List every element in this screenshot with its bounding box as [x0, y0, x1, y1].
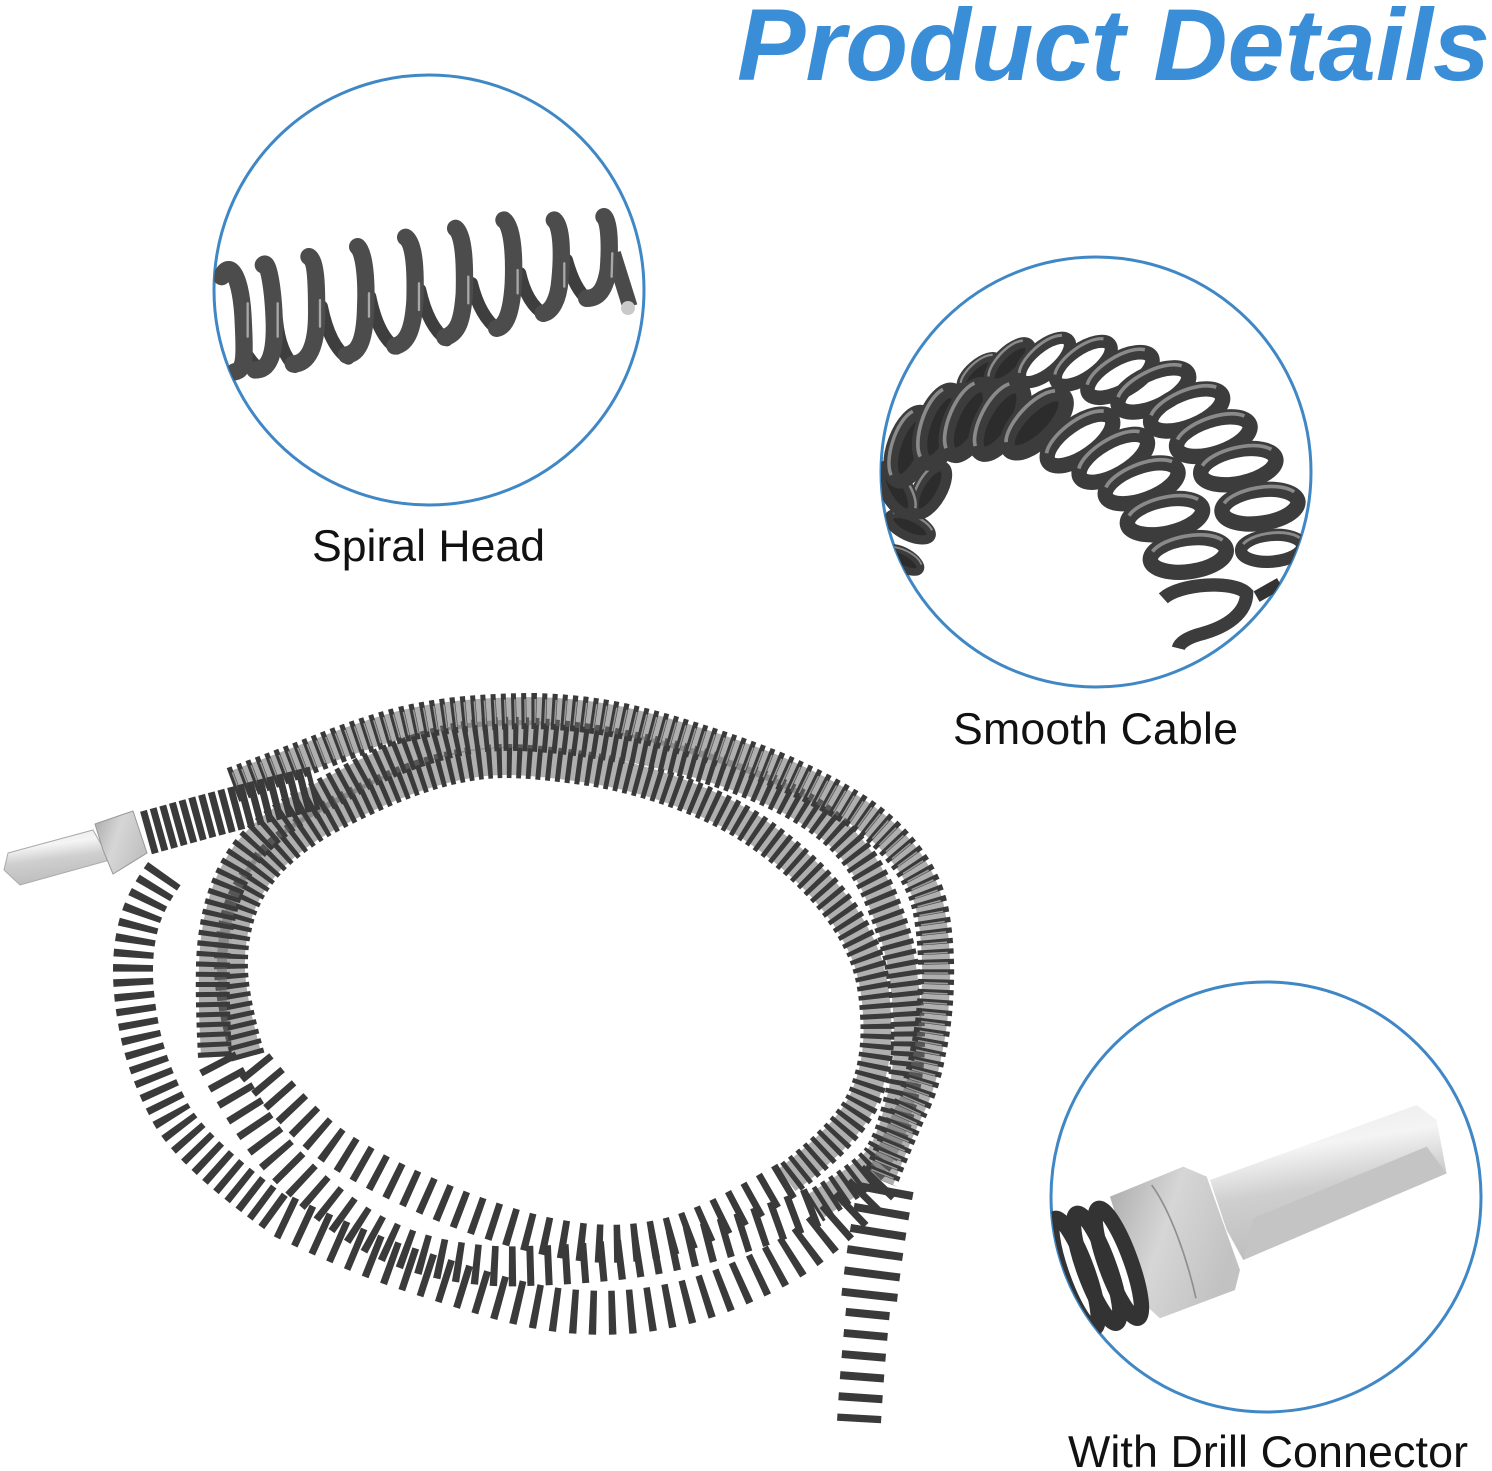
cable strand: middle loop — [213, 734, 908, 1266]
cable strand: outer loop — [133, 711, 936, 1313]
collar groove — [1152, 1185, 1196, 1298]
spiral coil — [222, 217, 635, 372]
panel: drill connector — [1043, 982, 1481, 1412]
wire tip — [621, 301, 635, 315]
connector close-up — [1043, 1105, 1447, 1332]
drill connector shank — [4, 830, 110, 885]
drill connector collar — [95, 811, 147, 874]
spring turns — [1043, 1204, 1150, 1332]
shank — [1210, 1105, 1447, 1260]
panel: spiral head — [214, 75, 644, 505]
tight spring by connector — [146, 788, 315, 833]
circle outline: drill connector — [1051, 982, 1481, 1412]
label: smooth cable: Smooth Cable — [953, 705, 1238, 754]
label: spiral head: Spiral Head — [312, 522, 545, 571]
cable strand: inner loop — [231, 761, 878, 1244]
cable tail end — [859, 1187, 886, 1422]
collar — [1110, 1167, 1240, 1318]
hex flat face — [1243, 1147, 1447, 1260]
circle outline: smooth cable — [881, 257, 1311, 687]
panel: smooth cable — [873, 257, 1311, 687]
main cable product photo — [4, 711, 936, 1422]
circle outline: spiral head — [214, 75, 644, 505]
coil rings close-up — [873, 329, 1303, 648]
